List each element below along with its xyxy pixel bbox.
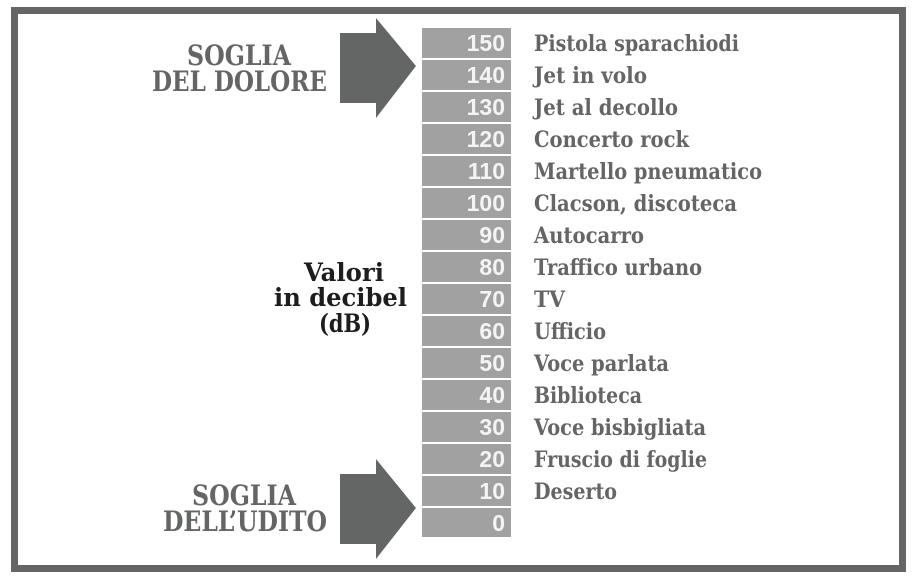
- decibel scale: 70: [479, 286, 505, 312]
- sound source labels: Ufficio: [534, 319, 606, 345]
- decibel scale: 110: [468, 158, 505, 184]
- decibel scale: 140: [467, 62, 505, 88]
- decibel scale: 20: [479, 446, 505, 472]
- sound source labels: Concerto rock: [534, 127, 690, 153]
- decibel scale: 100: [467, 190, 505, 216]
- decibel scale: 40: [479, 382, 505, 408]
- decibel scale: 150: [467, 30, 505, 56]
- sound source labels: Clacson, discoteca: [534, 191, 737, 217]
- decibel scale: 80: [479, 254, 505, 280]
- sound source labels: Biblioteca: [534, 383, 642, 409]
- arrow: soglia del dolore: [340, 18, 416, 118]
- sound source labels: TV: [534, 287, 566, 313]
- heading: soglia dell'udito: [163, 479, 327, 538]
- heading: soglia del dolore: [152, 39, 327, 98]
- decibel scale: 0: [492, 510, 505, 536]
- sound source labels: Deserto: [534, 479, 617, 505]
- arrow: soglia dell'udito: [340, 459, 416, 559]
- sound source labels: Traffico urbano: [534, 255, 702, 281]
- text: valori in decibel: [274, 258, 407, 338]
- sound source labels: Martello pneumatico: [534, 159, 762, 185]
- heading: soglia dell'udito: DELL’UDITO: [163, 505, 327, 538]
- sound source labels: Voce parlata: [533, 351, 669, 377]
- sound source labels: Jet in volo: [532, 63, 647, 89]
- heading: soglia del dolore: DEL DOLORE: [152, 65, 327, 98]
- decibel scale: 30: [479, 414, 505, 440]
- sound source labels: Voce bisbigliata: [533, 415, 706, 441]
- decibel scale: 10: [479, 478, 505, 504]
- decibel scale: 120: [467, 126, 505, 152]
- heading: soglia del dolore: SOGLIA: [187, 39, 292, 72]
- sound source labels: Pistola sparachiodi: [534, 31, 739, 57]
- text: valori in decibel: Valori: [303, 258, 384, 287]
- decibel scale: 50: [479, 350, 505, 376]
- decibel scale: [422, 28, 511, 537]
- text: valori in decibel: (dB): [319, 309, 371, 338]
- decibel scale: 90: [479, 222, 505, 248]
- heading: soglia dell'udito: SOGLIA: [192, 479, 297, 512]
- decibel scale: 60: [479, 318, 505, 344]
- decibel scale: 130: [467, 94, 505, 120]
- text: valori in decibel: in decibel: [274, 283, 407, 312]
- sound source labels: Fruscio di foglie: [534, 447, 707, 473]
- sound source labels: [532, 31, 762, 505]
- sound source labels: Jet al decollo: [532, 95, 678, 121]
- sound source labels: Autocarro: [533, 223, 644, 249]
